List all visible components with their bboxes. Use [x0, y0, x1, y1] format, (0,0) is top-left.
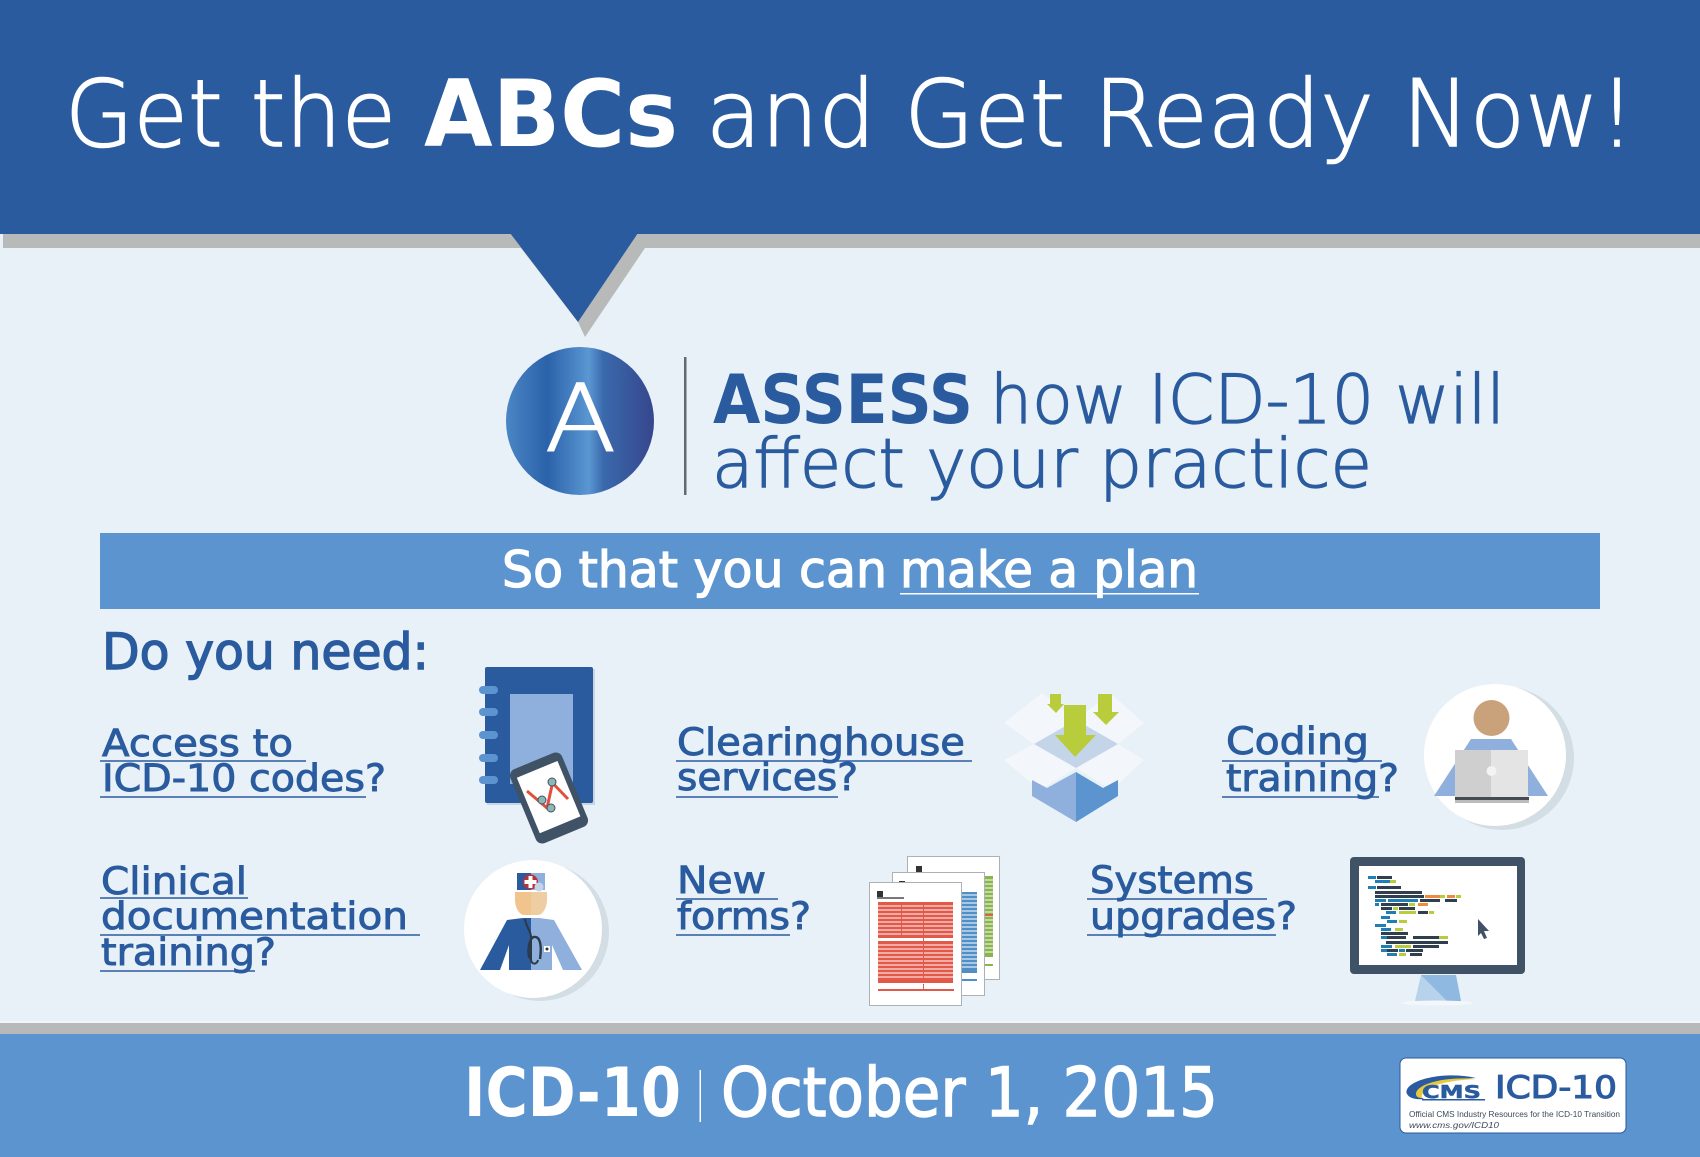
- title: ABCs: [424, 60, 678, 168]
- header banner with pointer: [0, 0, 1700, 337]
- icon: doctor: [464, 860, 609, 1001]
- item: coding training: [1222, 720, 1399, 800]
- title: and Get Ready Now!: [706, 60, 1635, 168]
- icon: open box with arrows: [1004, 693, 1144, 822]
- item: systems upgrades: [1087, 859, 1297, 938]
- title: Get the: [65, 60, 396, 168]
- assess heading: [712, 361, 1505, 504]
- assess heading: affect your practice: [712, 425, 1372, 504]
- item: clearinghouse services: [676, 721, 972, 799]
- CMS ICD-10 logo: ICD-10: [1495, 1070, 1617, 1106]
- divider: [684, 357, 686, 495]
- item: clinical documentation training: [100, 860, 420, 974]
- footer date: ICD-10: [464, 1054, 681, 1133]
- item: clinical documentation training: Clinical: [101, 860, 247, 903]
- title: [65, 60, 1635, 168]
- item: coding training: training?: [1226, 757, 1399, 800]
- letter A badge: [506, 347, 654, 495]
- CMS ICD-10 logo: [1400, 1058, 1626, 1133]
- item: coding training: Coding: [1226, 720, 1369, 763]
- item: access to ICD-10 codes: ICD-10 codes?: [102, 757, 386, 800]
- icon: computer monitor: [1350, 857, 1525, 1006]
- plan banner: [100, 533, 1600, 609]
- item: systems upgrades: upgrades?: [1090, 895, 1297, 938]
- item: clearinghouse services: Clearinghouse: [677, 721, 965, 764]
- second page: [892, 872, 984, 996]
- item: access to ICD-10 codes: Access to: [102, 722, 293, 765]
- item: clinical documentation training: training?: [101, 931, 276, 974]
- icon: stacked forms: [870, 856, 1000, 1006]
- plan banner: make a plan: [900, 541, 1198, 599]
- footer date: October 1, 2015: [721, 1054, 1218, 1133]
- item: systems upgrades: Systems: [1090, 859, 1254, 902]
- item: new forms: [676, 859, 811, 938]
- CMS ICD-10 logo: CMS: [1422, 1082, 1481, 1103]
- item: clearinghouse services: services?: [677, 756, 858, 799]
- assess heading: ASSESS: [713, 361, 973, 440]
- footer band: [0, 1021, 1700, 1157]
- CMS ICD-10 logo: Official CMS Industry Resources for the ICD-10 Transition: [1409, 1109, 1620, 1119]
- third page: [908, 856, 1000, 980]
- item: access to ICD-10 codes: [100, 722, 386, 800]
- footer date: [464, 1054, 1218, 1133]
- assess heading: how ICD-10 will: [990, 361, 1505, 440]
- icon: notebook and tablet: [479, 667, 595, 846]
- item: new forms: forms?: [677, 895, 811, 938]
- icon: person with laptop: [1424, 684, 1574, 830]
- do you need heading: Do you need:: [102, 623, 429, 681]
- letter A badge: A: [545, 365, 616, 473]
- item: clinical documentation training: documentation: [101, 895, 408, 938]
- front page: [870, 882, 962, 1006]
- item: new forms: New: [677, 859, 766, 902]
- plan banner: So that you can: [502, 541, 887, 599]
- CMS ICD-10 logo: www.cms.gov/ICD10: [1409, 1120, 1499, 1130]
